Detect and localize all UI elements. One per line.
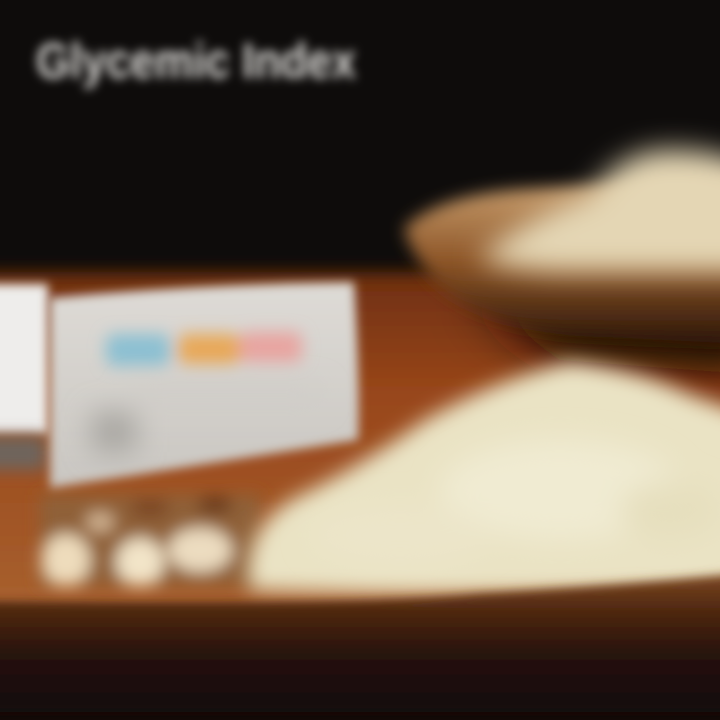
background: dark wall [0,0,720,275]
left white card [0,284,48,434]
rear bowl shadow [470,300,720,375]
title: Glycemic Index [36,33,356,89]
front table base [0,630,720,720]
card body [50,282,358,488]
card chart marks [92,388,320,452]
mound highlights [310,440,720,565]
small rice pile with brown gaps [40,495,260,586]
main index card [50,282,358,488]
card colour bar [106,332,302,366]
wooden table surface [0,272,720,612]
dark gap beneath left card [0,436,46,470]
front table edge [0,572,720,712]
bowl rice [478,150,720,272]
large rice mound [248,362,720,594]
rear wooden bowl [404,180,720,345]
